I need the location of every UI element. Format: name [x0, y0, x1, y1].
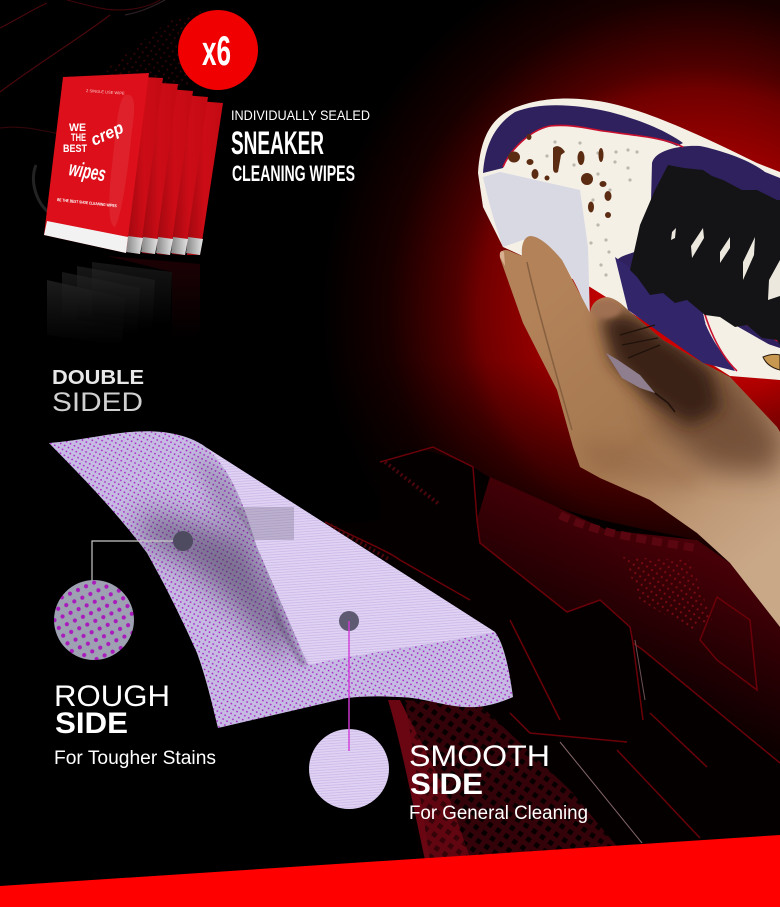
sneaker navy collar: [483, 105, 683, 173]
label: smooth side: For General Cleaning: [409, 803, 588, 824]
heading: sneaker cleaning wipes: [231, 107, 370, 186]
front packet: THE: [71, 132, 86, 144]
sneaker red trim: [503, 125, 780, 371]
front packet: WE: [69, 122, 86, 134]
label: rough side: [54, 680, 216, 769]
front packet: [44, 73, 149, 253]
thumb creases: [620, 325, 660, 358]
packets reflection: [47, 256, 200, 345]
x6 badge: x6: [202, 27, 231, 74]
rough side marker: [173, 531, 193, 551]
thumb web crease: [655, 393, 675, 412]
background sneaker lower right: [325, 447, 780, 868]
sneaker white toe: [705, 323, 780, 380]
fold shadow: [140, 450, 300, 650]
background sneaker top left: [0, 0, 205, 212]
label: smooth side: SIDE: [410, 768, 483, 801]
smooth side marker: [339, 611, 359, 631]
black laces: [630, 165, 780, 345]
rough outer side: [49, 431, 513, 728]
front packet: wipes: [67, 157, 108, 186]
rough side callout line: [92, 541, 183, 595]
front packet: crep: [88, 118, 127, 150]
heading: double sided: [52, 367, 144, 417]
mud droplets: [508, 134, 612, 218]
packet 5: [170, 94, 208, 255]
wipe on sneaker: [483, 172, 590, 320]
translucent fold patch: [233, 507, 294, 540]
smooth side callout line: [348, 621, 350, 751]
x6 badge: [178, 10, 258, 90]
sneaker navy eyestay: [617, 146, 780, 350]
sneaker upper: [478, 98, 780, 380]
finger crease: [527, 262, 572, 430]
heading: sneaker cleaning wipes: INDIVIDUALLY SEALED: [231, 107, 370, 123]
back of hand shading: [640, 350, 780, 475]
hand and forearm: [490, 230, 780, 640]
wipe under thumb: [606, 353, 655, 393]
fingernails: [500, 251, 505, 266]
label: smooth side: [409, 740, 588, 824]
sneaker perforations: [545, 140, 639, 277]
thumb tip: [591, 300, 621, 318]
wipes packets: [44, 73, 223, 255]
packet 4: [155, 88, 193, 255]
red footer band: [0, 835, 780, 907]
palm shading: [594, 449, 693, 488]
heading: double sided: SIDED: [52, 387, 143, 417]
double sided wipe: [49, 431, 513, 728]
front packet: 2 SINGLE USE WIPE: [86, 88, 125, 96]
front packet: BE THE BEST SHOE CLEANING WIPES: [57, 197, 117, 208]
smooth inner flap: [207, 448, 495, 665]
front packet: BEST: [63, 143, 87, 155]
label: smooth side: SMOOTH: [409, 740, 550, 773]
sneaker toe panel: [615, 257, 735, 371]
thumb shadow: [600, 312, 720, 425]
heading: sneaker cleaning wipes: SNEAKER: [231, 125, 324, 161]
label: rough side: For Tougher Stains: [54, 748, 216, 769]
packet 3: [140, 82, 178, 254]
sneaker held in hand: [478, 98, 780, 380]
rough side detail circle: [54, 580, 134, 660]
heading: sneaker cleaning wipes: CLEANING WIPES: [232, 161, 355, 186]
lace gaps: [671, 228, 780, 300]
packet 2: [125, 76, 163, 254]
smooth side detail circle: [309, 729, 389, 809]
label: rough side: ROUGH: [54, 680, 170, 713]
heading: double sided: DOUBLE: [52, 367, 144, 389]
label: rough side: SIDE: [55, 707, 128, 740]
sneaker logo patch: [763, 354, 780, 370]
packet 6: [185, 100, 223, 255]
